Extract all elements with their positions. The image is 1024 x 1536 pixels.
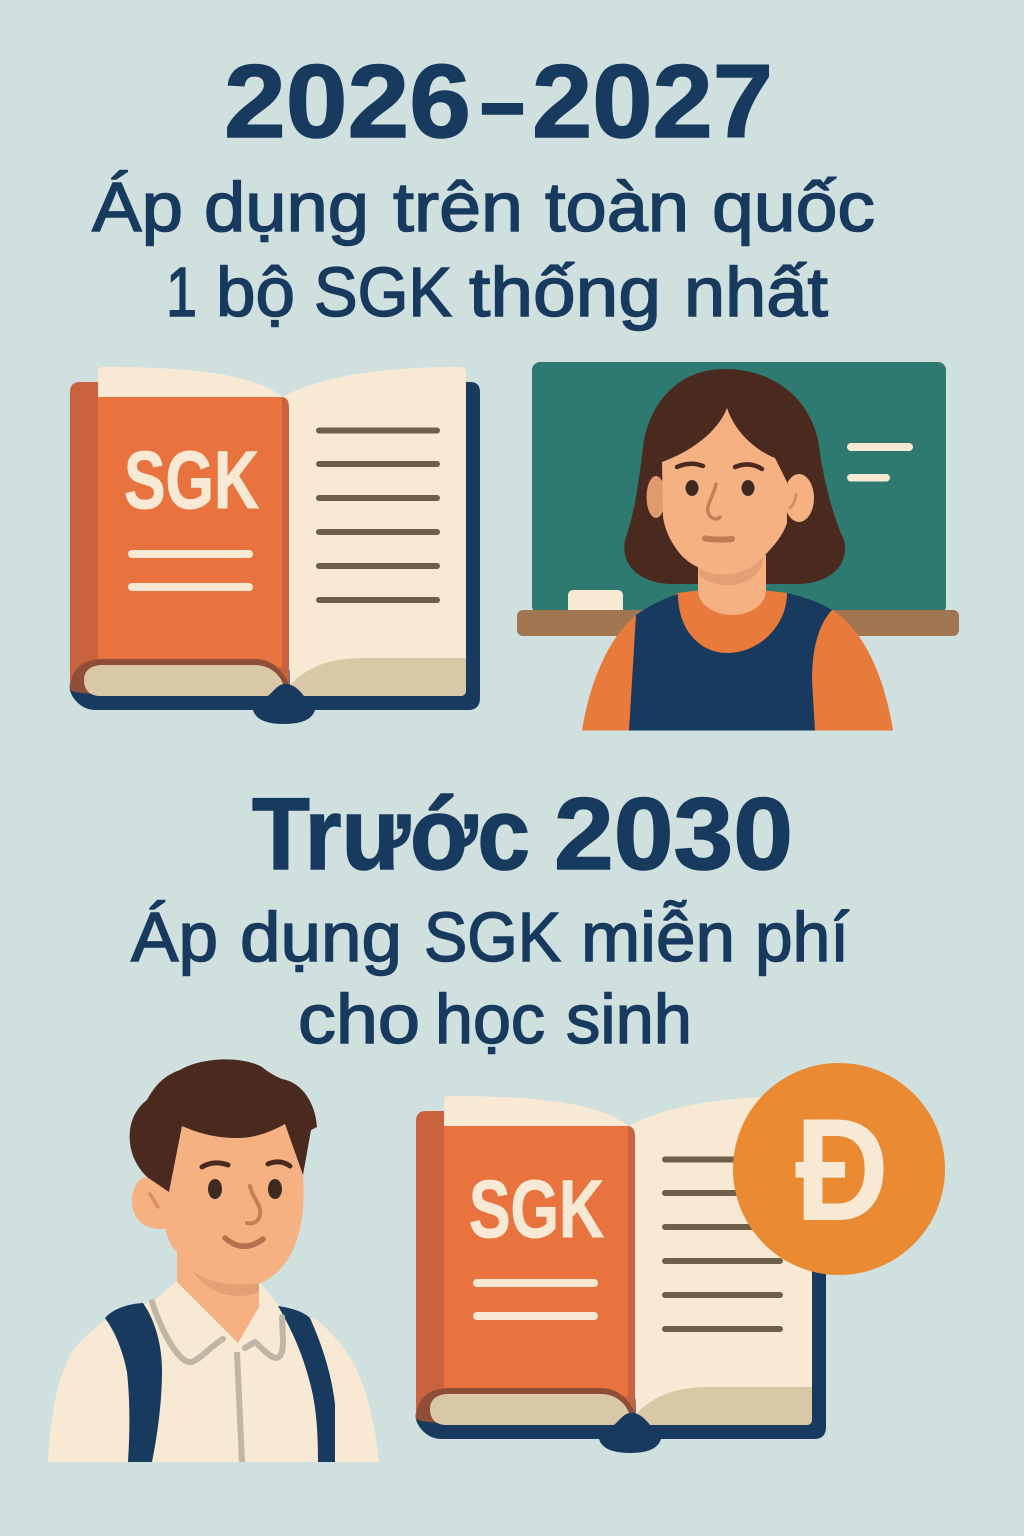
subheading: free textbooks: cho	[298, 980, 420, 1058]
heading: Trước 2030: Trước	[252, 777, 530, 891]
heading: Trước 2030: 2030	[554, 777, 793, 891]
heading: 2026–2027	[224, 44, 773, 160]
label: SGK: SGK	[124, 435, 259, 526]
subheading: free textbooks: SGK	[424, 898, 561, 976]
icon: open SGK book with coin: SGK	[469, 1164, 604, 1255]
subheading: nationwide application: 1	[166, 253, 197, 331]
subheading: nationwide application: SGK	[314, 253, 452, 331]
subheading: free textbooks: Áp	[131, 898, 218, 976]
icon: student with backpack	[48, 1059, 379, 1462]
heading: 2026–2027: 2026	[224, 44, 471, 160]
heading: Trước 2030	[252, 777, 793, 891]
ear	[132, 1177, 172, 1229]
subheading: free textbooks: phí	[755, 898, 850, 976]
subheading: free textbooks: học	[435, 980, 545, 1058]
icon: open SGK book	[70, 367, 480, 724]
icon: dong coin: Đ	[795, 1088, 889, 1251]
heading: 2026–2027: 2027	[532, 44, 773, 160]
subheading: nationwide application: bộ	[216, 253, 295, 331]
subheading: nationwide application: nhất	[684, 253, 828, 331]
subheading: nationwide application: trên	[393, 168, 523, 246]
subheading: free textbooks: miễn	[581, 898, 735, 976]
subheading: nationwide application: dụng	[204, 168, 369, 246]
subheading: nationwide application: toàn	[545, 168, 689, 246]
subheading: free textbooks: sinh	[566, 980, 692, 1058]
icon: teacher at chalkboard	[517, 362, 959, 730]
icon: open SGK book with coin	[416, 1063, 945, 1453]
subheading: nationwide application: thống	[469, 253, 661, 331]
subheading: free textbooks	[131, 898, 850, 1058]
subheading: nationwide application: Áp	[92, 168, 183, 246]
subheading: nationwide application	[92, 168, 875, 331]
heading: 2026–2027: –	[480, 44, 525, 160]
subheading: nationwide application: quốc	[712, 168, 875, 246]
subheading: free textbooks: dụng	[240, 898, 402, 976]
icon: dong coin	[733, 1063, 945, 1275]
